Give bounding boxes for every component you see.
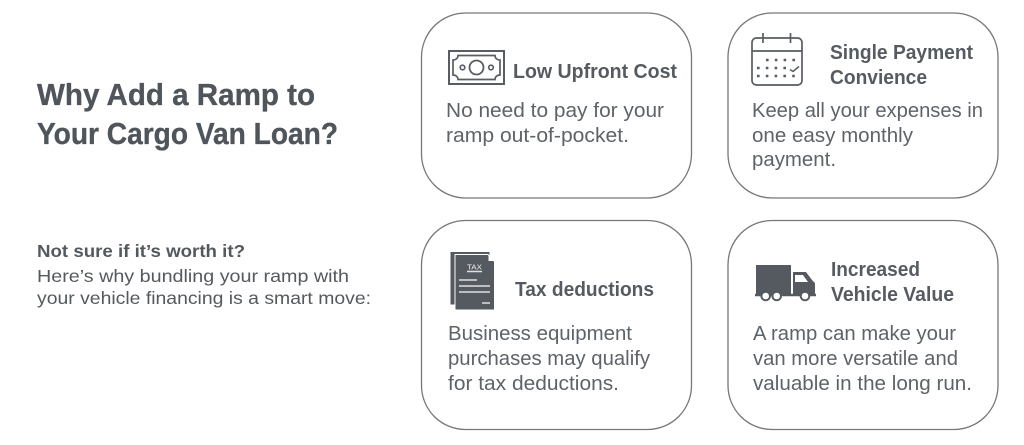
body text: A ramp can make your xyxy=(753,322,956,345)
intro text: Here’s why bundling your ramp with xyxy=(37,266,349,286)
panel: low upfront cost xyxy=(422,13,692,198)
body text: No need to pay for your xyxy=(446,99,664,122)
body text: purchases may qualify xyxy=(448,347,651,370)
icon: calendar xyxy=(752,33,802,85)
heading: Single Payment xyxy=(830,41,973,64)
heading: Low Upfront Cost xyxy=(513,60,677,83)
title: Why Add a Ramp to xyxy=(37,78,315,112)
panel: tax deductions xyxy=(422,220,692,430)
body text: van more versatile and xyxy=(753,347,958,370)
heading xyxy=(830,41,973,89)
body text xyxy=(446,99,664,147)
intro text: Not sure if it’s worth it? xyxy=(37,241,245,261)
body text: valuable in the long run. xyxy=(753,372,972,395)
icon: tax document xyxy=(450,252,494,310)
body text xyxy=(448,322,651,395)
heading: Increased xyxy=(831,258,920,281)
body text: payment. xyxy=(752,148,836,171)
intro text xyxy=(37,241,371,308)
body text: Keep all your expenses in xyxy=(752,99,983,122)
icon: banknote xyxy=(449,51,504,84)
intro text: your vehicle financing is a smart move: xyxy=(37,288,371,308)
body text xyxy=(752,99,983,171)
panel: single payment convenience xyxy=(728,13,998,198)
body text xyxy=(753,322,972,395)
heading xyxy=(831,258,954,306)
title: Your Cargo Van Loan? xyxy=(37,117,338,151)
body text: Business equipment xyxy=(448,322,632,345)
heading: Convience xyxy=(830,66,927,89)
title xyxy=(37,78,338,151)
body text: for tax deductions. xyxy=(448,372,619,395)
icon: truck xyxy=(755,265,816,300)
icon: tax document: TAX xyxy=(467,262,482,272)
body text: ramp out-of-pocket. xyxy=(446,124,629,147)
heading: Tax deductions xyxy=(515,278,654,301)
panel: increased vehicle value xyxy=(728,220,998,430)
body text: one easy monthly xyxy=(752,124,914,147)
heading: Vehicle Value xyxy=(831,283,954,306)
